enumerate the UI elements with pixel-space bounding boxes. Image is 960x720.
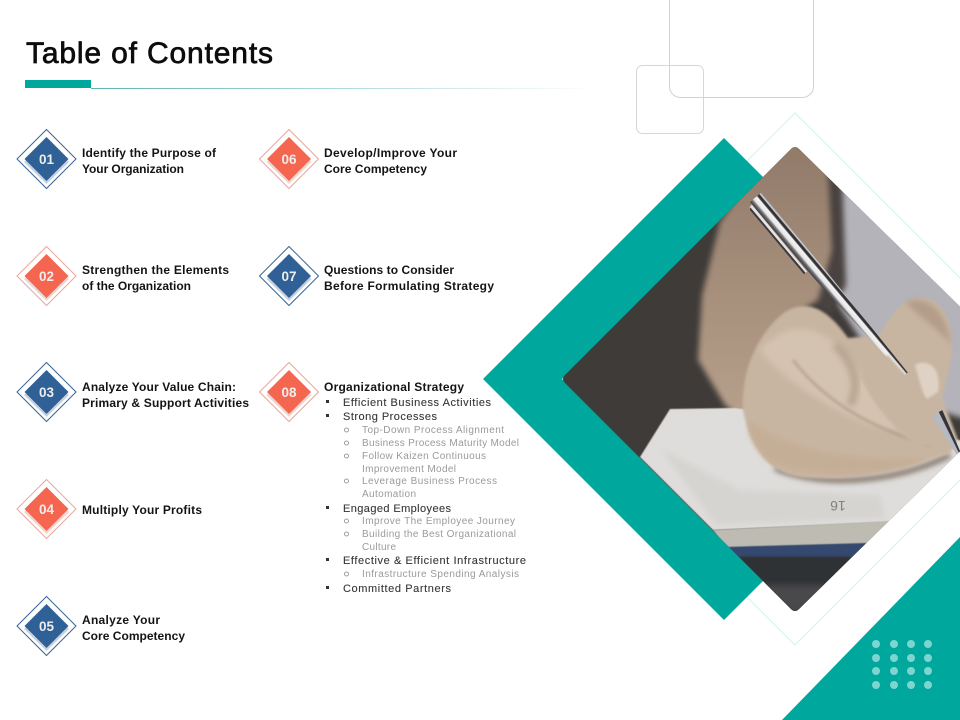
item 08 with nested list: Automation <box>362 489 416 500</box>
pen tip <box>932 410 960 454</box>
item 07 <box>260 246 494 306</box>
index finger over pen <box>862 354 932 446</box>
item 08 with nested list: Top-Down Process Alignment <box>362 425 504 436</box>
item 06: Core Competency <box>324 162 427 176</box>
item 08 with nested list: Leverage Business Process <box>362 476 497 487</box>
item 08 with nested list: Efficient Business Activities <box>343 397 492 409</box>
item 08 with nested list: Follow Kaizen Continuous <box>362 451 486 462</box>
dot grid <box>872 640 932 689</box>
item 08 with nested list: Organizational Strategy <box>324 380 464 394</box>
item 05: 05 <box>39 619 55 634</box>
item 06: 06 <box>282 152 297 167</box>
teal corner triangle <box>782 537 960 720</box>
item 03: Analyze Your Value Chain: <box>82 380 236 394</box>
item 08 with nested list: Culture <box>362 542 396 553</box>
item 03: 03 <box>39 385 55 400</box>
item 05: Core Competency <box>82 629 185 643</box>
item 02: of the Organization <box>82 279 191 293</box>
item 04 <box>17 480 202 538</box>
teal diamond band <box>483 138 764 620</box>
item 02 <box>17 246 229 306</box>
notebook <box>640 408 960 530</box>
item 02: Strengthen the Elements <box>82 263 229 277</box>
item 08 with nested list: Business Process Maturity Model <box>362 438 519 449</box>
item 04: 04 <box>39 502 55 517</box>
item 01: Your Organization <box>82 162 184 176</box>
hand <box>743 298 958 478</box>
title: Table of Contents <box>26 37 273 70</box>
item 04: Multiply Your Profits <box>82 503 202 517</box>
item 03 <box>17 362 249 422</box>
item 06 <box>260 130 457 188</box>
item 06: Develop/Improve Your <box>324 146 457 160</box>
item 02: 02 <box>39 269 54 284</box>
item 08 with nested list: 08 <box>282 385 297 400</box>
item 08 with nested list: Strong Processes <box>343 411 438 423</box>
item 08 with nested list <box>260 362 526 595</box>
decorative outline square: small <box>636 66 704 134</box>
item 07: Before Formulating Strategy <box>324 279 494 293</box>
item 07: Questions to Consider <box>324 263 454 277</box>
item 08 with nested list: Infrastructure Spending Analysis <box>362 569 519 580</box>
item 01: Identify the Purpose of <box>82 146 217 160</box>
item 01: 01 <box>39 152 55 167</box>
item 01 <box>17 130 217 188</box>
photo: hand writing with pen <box>563 147 960 611</box>
item 05 <box>17 596 185 656</box>
outline diamond behind photo <box>529 113 960 645</box>
item 05: Analyze Your <box>82 613 160 627</box>
item 07: 07 <box>282 269 297 284</box>
item 08 with nested list: Committed Partners <box>343 583 452 595</box>
decorative outline square: large <box>670 0 814 98</box>
hand shadow on page <box>775 455 950 480</box>
item 08 with nested list: Effective & Efficient Infrastructure <box>343 555 526 567</box>
item 08 with nested list: Improve The Employee Journey <box>362 516 515 527</box>
item 08 with nested list: Building the Best Organizational <box>362 529 516 540</box>
pen <box>746 192 911 383</box>
item 03: Primary & Support Activities <box>82 396 249 410</box>
item 08 with nested list: Improvement Model <box>362 464 456 475</box>
item 08 with nested list: Engaged Employees <box>343 503 452 515</box>
page number: 16 <box>830 498 846 514</box>
title rule <box>25 80 596 89</box>
